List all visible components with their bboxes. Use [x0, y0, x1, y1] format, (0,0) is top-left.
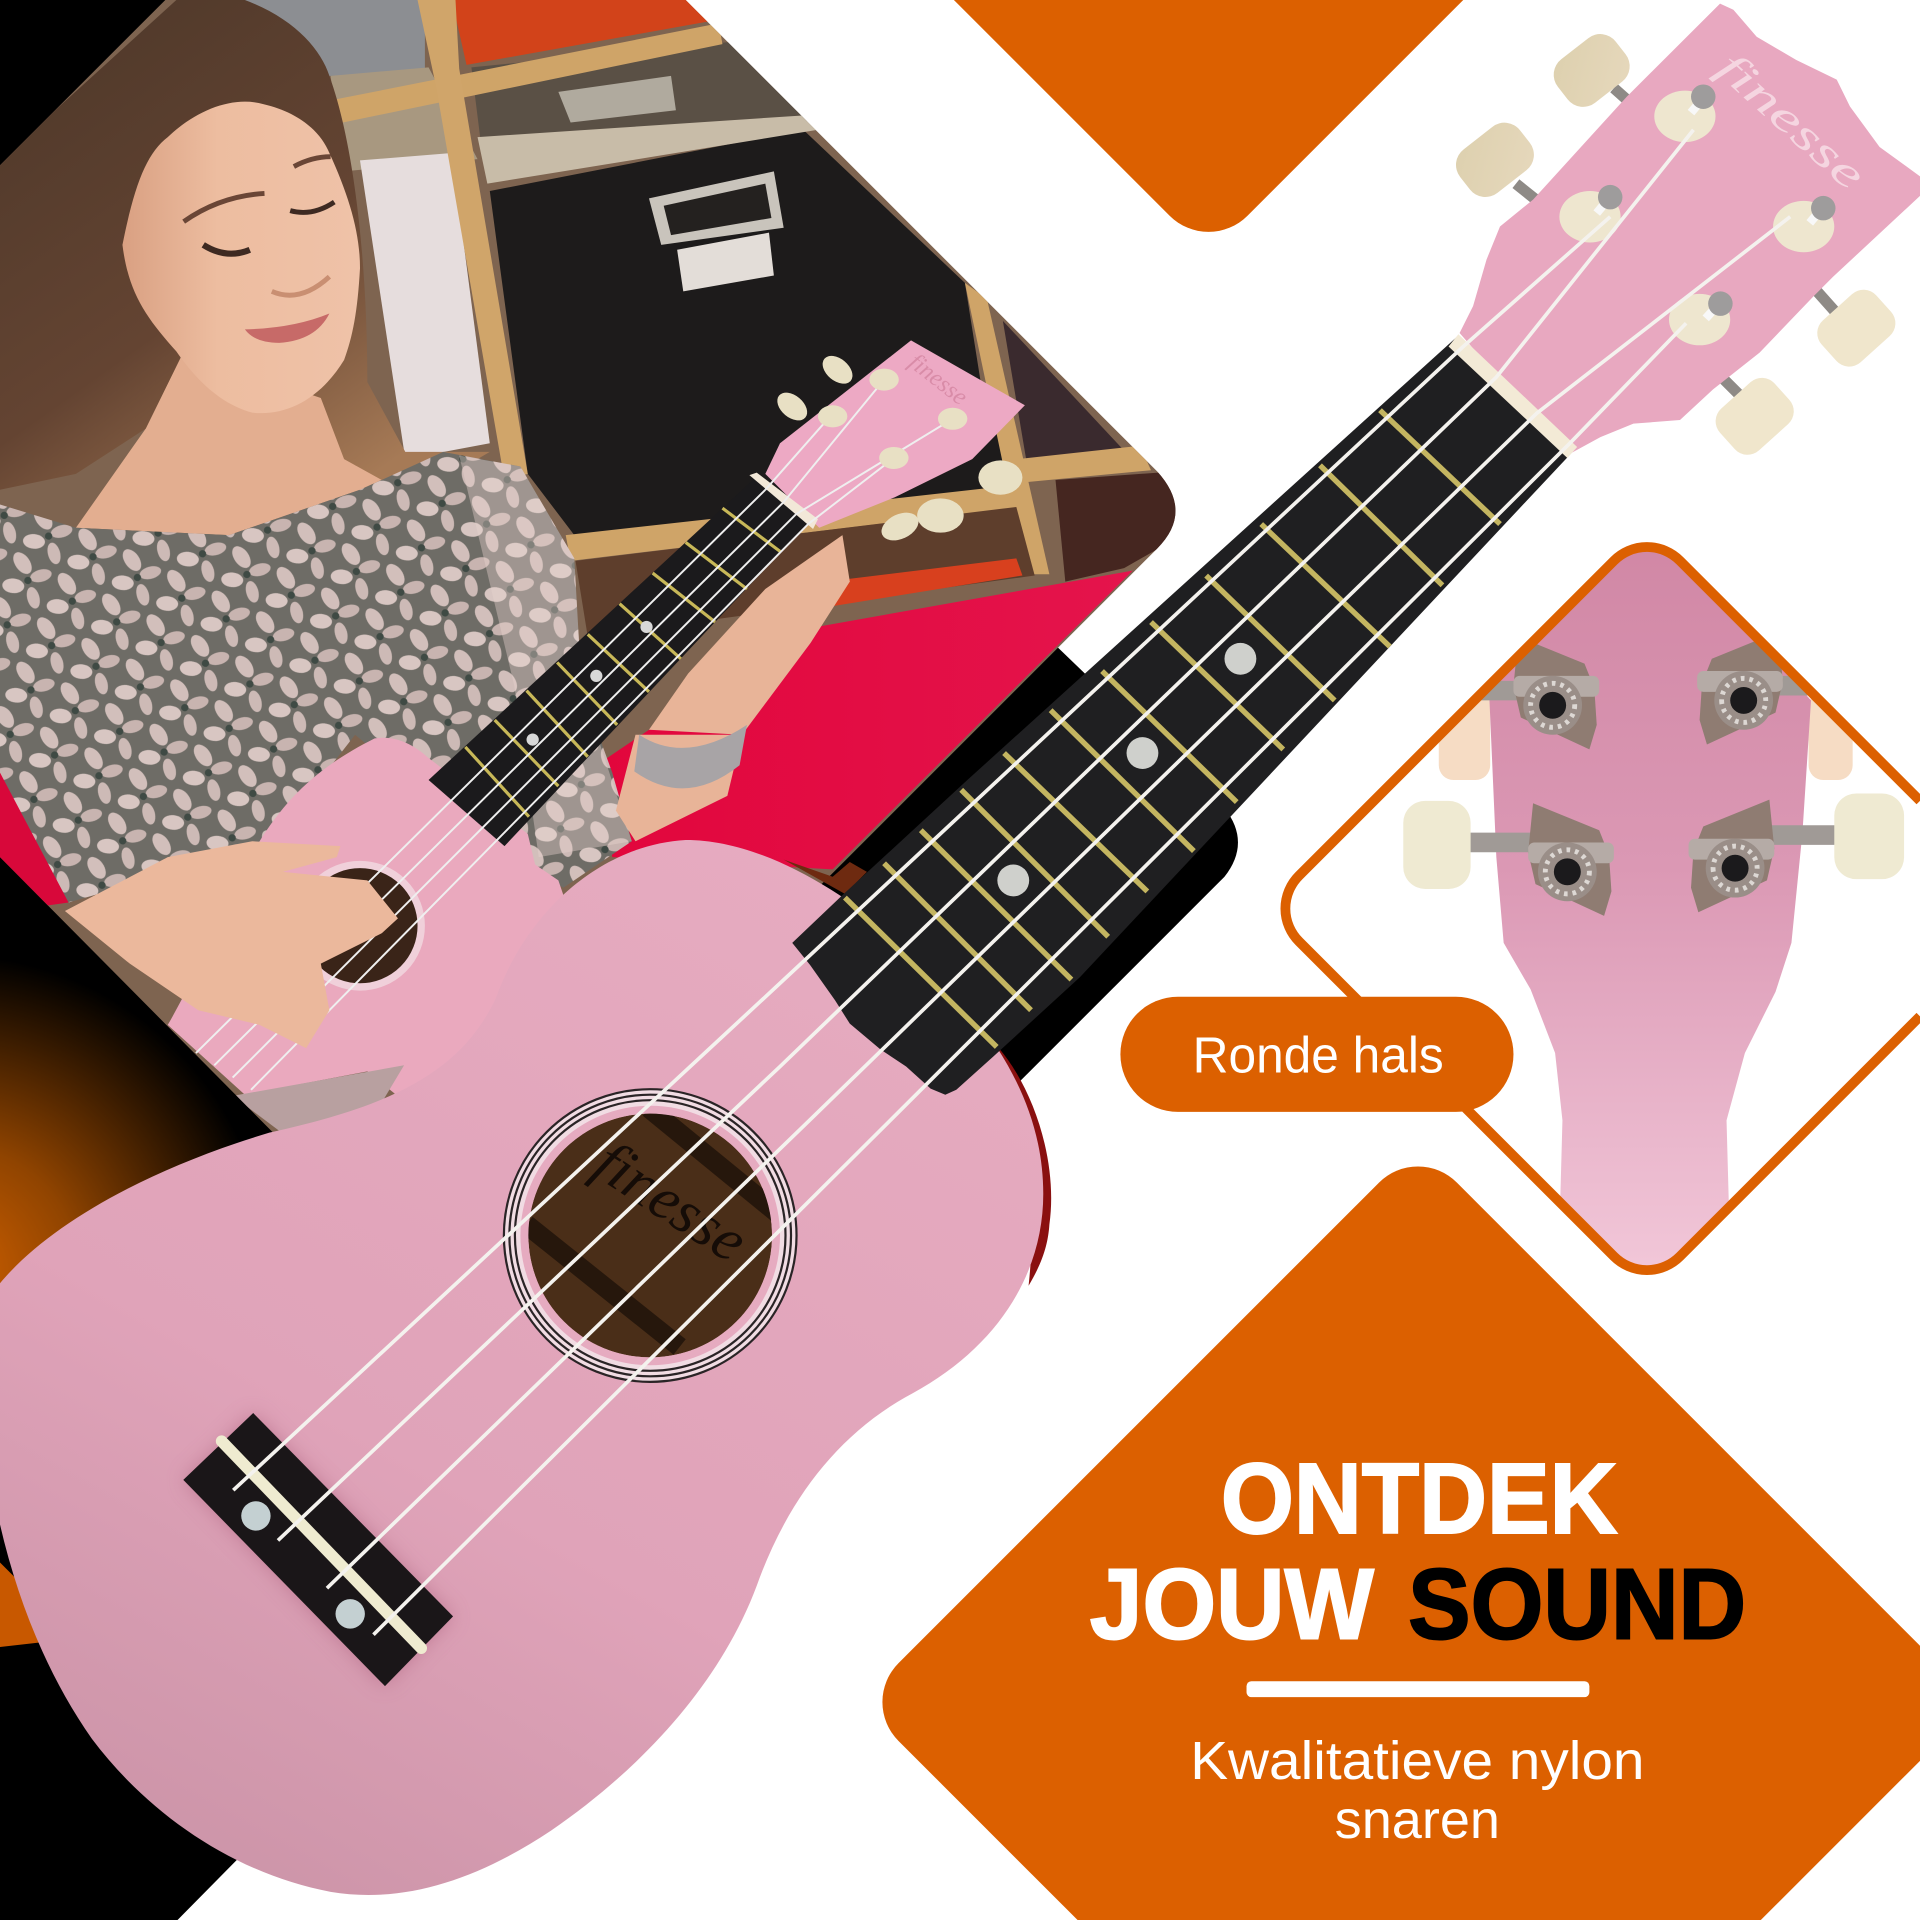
heading line 2: SOUND: [1408, 1548, 1746, 1660]
panel: photo of woman playing ukulele: [0, 0, 1176, 1132]
detail clipped content: [1403, 514, 1904, 1298]
small strings: [196, 380, 953, 1090]
face: [122, 102, 360, 413]
tuner mechanism bottom right: [1689, 800, 1774, 912]
fretting hand: [649, 535, 850, 735]
brows: [184, 157, 331, 222]
diamond outline: [1285, 547, 1920, 1270]
nose: [272, 277, 329, 295]
ukulele body: [0, 840, 1043, 1895]
fret dots: [997, 643, 1256, 896]
heading line 2: [1090, 1548, 1746, 1660]
label pill: Ronde hals: Ronde hals: [1193, 1026, 1444, 1084]
bridge dots: [241, 1501, 365, 1629]
soundhole label bands: [527, 1108, 784, 1347]
upper knobs: [1439, 686, 1853, 780]
bracelet: [634, 725, 747, 788]
small headstock: [765, 340, 1025, 528]
red couch: [596, 571, 1133, 869]
tuner pegs: [1559, 84, 1836, 345]
headstock logo: finesse: [1708, 42, 1875, 200]
small fret dots: [527, 621, 653, 746]
small soundhole: [299, 864, 421, 987]
subtitle: [1190, 1731, 1644, 1850]
left tuner knob: [1403, 801, 1471, 889]
rear headstock: [1489, 514, 1811, 1298]
small logo: finesse: [904, 348, 973, 411]
small ukulele body: [168, 738, 576, 1108]
heading line 1: ONTDEK: [1221, 1443, 1618, 1555]
nut: [1449, 334, 1577, 458]
saddle: [222, 1441, 421, 1648]
lace sleeve highlight: [459, 456, 632, 857]
soundhole rings: [504, 1089, 797, 1382]
lips: [245, 313, 329, 343]
neck and chest skin: [76, 358, 382, 535]
panel: rounded neck detail: [1285, 514, 1920, 1298]
divider line: [1247, 1681, 1589, 1697]
tuner mechanism top right: [1697, 632, 1783, 744]
red couch left: [0, 771, 69, 912]
forearm: [616, 735, 742, 841]
small nut: [749, 473, 818, 529]
soundhole: [527, 1108, 784, 1357]
headstock: [1460, 4, 1920, 456]
small ukulele: [168, 340, 1025, 1108]
panel: bottom orange diamond: [882, 1166, 1920, 1920]
tuner mechanism bottom left: [1528, 803, 1614, 916]
bridge: [183, 1413, 453, 1686]
right tuner knob: [1834, 793, 1904, 879]
bridge shadow: [184, 1413, 453, 1686]
red side edge: [980, 1047, 1051, 1286]
small frets: [465, 508, 781, 817]
tuning knobs: [1448, 26, 1902, 462]
tuner mechanism top left: [1513, 637, 1599, 749]
soundhole label: finesse: [583, 1128, 759, 1276]
eye left: [203, 245, 250, 254]
lace top: [0, 452, 632, 902]
strings: [233, 130, 1790, 1635]
picking hand: [65, 841, 398, 1048]
small fretboard: [429, 479, 811, 846]
heading line 2: JOUW: [1090, 1548, 1374, 1660]
hair: [0, 0, 490, 497]
fretboard: [792, 336, 1577, 1095]
photo background shelves: [0, 0, 1176, 1132]
top-left black corner: [0, 0, 171, 171]
upper red rim: [784, 860, 867, 894]
knob shafts: [1516, 88, 1837, 394]
subtitle: Kwalitatieve nylon: [1190, 1731, 1644, 1791]
tuner shafts: [1457, 676, 1849, 852]
black diamond behind neck: [784, 643, 1238, 1085]
subtitle: snaren: [1335, 1790, 1500, 1850]
skirt at lower edge: [233, 1065, 404, 1133]
small pegs: [772, 350, 1022, 546]
left black panel with orange glow: [0, 851, 429, 1920]
eye right: [290, 202, 334, 212]
label pill: Ronde hals: [1120, 997, 1513, 1112]
frets: [845, 410, 1500, 1047]
top orange diamond: [954, 0, 1463, 232]
